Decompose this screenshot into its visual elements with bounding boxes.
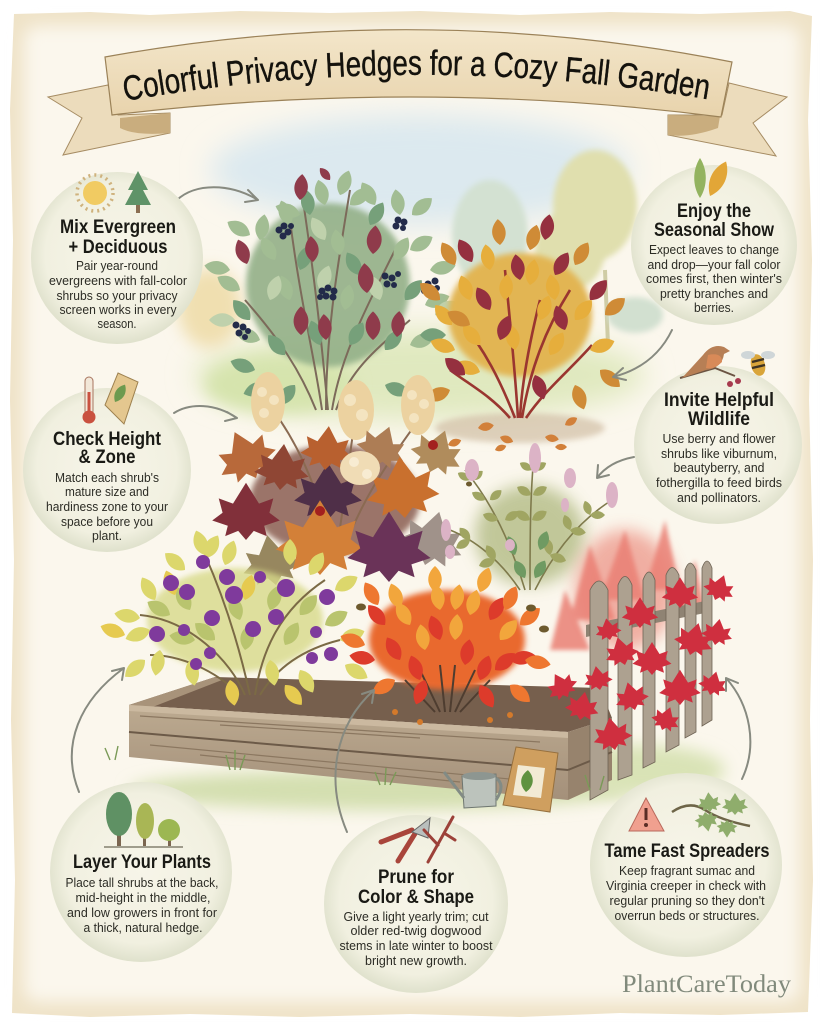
body text: Give a light yearly trim; cut: [344, 909, 489, 924]
arrow: prune up: [336, 690, 374, 832]
body text: hardiness zone to your: [46, 499, 169, 514]
panel: tame fast spreaders: [590, 773, 782, 957]
body text: older red-twig dogwood: [350, 923, 482, 938]
title: Colorful Privacy Hedges for a Cozy Fall Garden: [124, 49, 709, 100]
body text: pretty branches and: [660, 286, 768, 301]
body text: [606, 863, 766, 923]
icon: leaves: [694, 158, 733, 199]
body text: shrubs so your privacy: [56, 288, 178, 303]
heading: Tame Fast Spreaders: [604, 840, 770, 862]
body text: [46, 470, 169, 543]
body text: Expect leaves to change: [649, 242, 779, 257]
body text: mature size and: [65, 484, 149, 499]
icon: vine: [672, 791, 750, 838]
heading: + Deciduous: [68, 236, 168, 258]
watering can: [444, 772, 501, 808]
arrow: tame spreaders up: [726, 678, 750, 779]
shrub: beautyberry with purple clusters: [98, 528, 371, 709]
banner tails: [48, 83, 787, 156]
body text: screen works in every: [60, 302, 177, 317]
body text: Place tall shrubs at the back,: [66, 875, 218, 890]
icon: bee: [741, 351, 775, 377]
arrow: evergreen to shrub: [177, 187, 258, 202]
heading: Wildlife: [688, 408, 750, 430]
body text: [66, 875, 218, 935]
heading: Layer Your Plants: [73, 851, 211, 873]
shrub: viburnum with dark berries: [203, 165, 461, 414]
icon: thermometer: [82, 377, 96, 424]
body text: plant.: [92, 528, 122, 543]
grass tufts: [105, 746, 604, 790]
body text: mid-height in the middle,: [76, 890, 210, 905]
icon: pruners: [381, 818, 430, 861]
shrub: fothergilla with pink blooms: [441, 443, 618, 590]
body text: Pair year-round: [76, 258, 158, 273]
heading: & Zone: [78, 446, 136, 468]
arrows: [72, 187, 750, 832]
panel: layer your plants: [50, 782, 232, 962]
body text: regular pruning so they don't: [610, 893, 765, 908]
body text: and pollinators.: [677, 490, 761, 505]
body text: a thick, natural hedge.: [84, 920, 202, 935]
heading: Invite Helpful: [664, 389, 774, 411]
body text: evergreens with fall-color: [49, 273, 188, 288]
heading: Check Height: [53, 428, 161, 450]
background sky and landscape: [178, 115, 663, 420]
icon: red twig: [424, 817, 455, 862]
body text: [646, 242, 782, 315]
body text: fothergilla to feed birds: [656, 475, 782, 490]
heading: Color & Shape: [358, 886, 474, 908]
arrow: layer plants up: [72, 668, 124, 792]
body text: overrun beds or structures.: [614, 908, 760, 923]
heading: Mix Evergreen: [60, 216, 176, 238]
body text: and drop—your fall color: [648, 257, 781, 272]
icon: warning triangle: [629, 798, 664, 831]
raised wooden garden bed: [129, 677, 725, 810]
heading: [654, 200, 775, 241]
panel: invite helpful wildlife: [634, 346, 802, 524]
heading: Enjoy the: [677, 200, 751, 222]
banner body: [105, 30, 732, 117]
heading: [664, 389, 774, 430]
bees: [356, 482, 549, 632]
body text: and low growers in front for: [67, 905, 218, 920]
body text: season.: [98, 316, 136, 331]
body text: stems in late winter to boost: [340, 938, 493, 953]
icon: pine tree: [125, 171, 151, 213]
icon: three layered shrubs: [104, 792, 183, 847]
shrub: orange and red foliage: [338, 565, 552, 725]
arrow: height to hydrangea: [174, 406, 237, 421]
body text: berries.: [694, 300, 734, 315]
body text: space before you: [61, 514, 153, 529]
body text: [340, 909, 493, 968]
seed packet: [503, 747, 558, 812]
body text: shrubs like viburnum,: [661, 446, 777, 461]
arrow: wildlife to fothergilla: [597, 457, 634, 478]
body text: Match each shrub's: [55, 470, 159, 485]
wooden picket fence with red creeper: [541, 561, 739, 800]
heading: Prune for: [378, 866, 454, 888]
shrub: red-twig dogwood with golden leaves: [416, 213, 629, 453]
heading: [53, 428, 161, 468]
title banner: [46, 29, 788, 157]
panel: enjoy the seasonal show: [631, 158, 797, 325]
heading: [60, 216, 176, 258]
heading: Seasonal Show: [654, 219, 775, 241]
brand wordmark: PlantCareToday: [622, 971, 792, 998]
icon: plant tag: [105, 373, 138, 424]
body text: [656, 431, 782, 505]
body text: comes first, then winter's: [646, 271, 782, 286]
body text: Virginia creeper in check with: [606, 878, 766, 893]
arrow: seasonal show to dogwood: [613, 330, 672, 380]
body text: Use berry and flower: [662, 431, 776, 446]
body text: beautyberry, and: [674, 460, 764, 475]
panel: mix evergreen and deciduous: [31, 171, 203, 344]
body text: [49, 258, 188, 331]
body text: bright new growth.: [365, 953, 467, 968]
icon: bird on branch: [680, 346, 741, 387]
heading: [358, 866, 474, 908]
body text: Keep fragrant sumac and: [619, 863, 755, 878]
panel: check height and zone: [23, 373, 191, 552]
icon: sun: [77, 175, 113, 211]
shrub: oakleaf hydrangea: [208, 372, 471, 590]
shrub: pink astilbe behind fence: [550, 520, 705, 650]
panel: prune for color and shape: [324, 815, 508, 993]
